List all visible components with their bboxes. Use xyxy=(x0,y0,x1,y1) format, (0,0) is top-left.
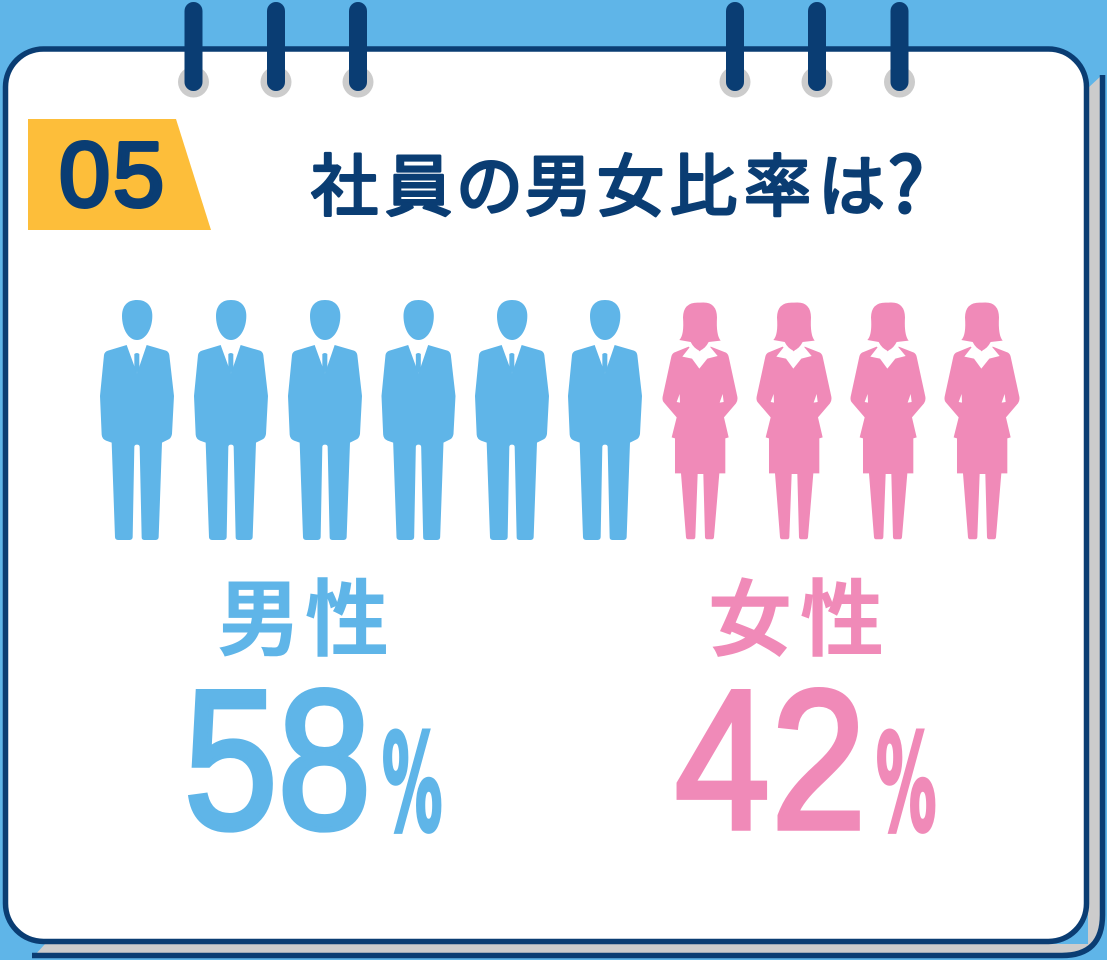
title: 社員の男女比率は xyxy=(311,133,885,230)
woman icon 3 xyxy=(850,302,925,539)
male percentage: 58 xyxy=(184,649,371,870)
female percentage: % xyxy=(876,706,936,862)
man icon 3 xyxy=(288,300,362,540)
man icon 4 xyxy=(381,300,455,540)
woman icon 2 xyxy=(756,302,831,539)
man icon 5 xyxy=(475,300,549,540)
number badge xyxy=(28,119,211,230)
male label: 男性 xyxy=(217,553,389,674)
binding rings xyxy=(178,11,915,98)
female label: 女性 xyxy=(708,553,884,674)
woman icon 4 xyxy=(944,302,1019,539)
number badge: 05 xyxy=(59,124,164,226)
woman icon 1 xyxy=(662,302,737,539)
title: ? xyxy=(888,124,924,234)
man icon 6 xyxy=(568,300,642,540)
pictogram row: women xyxy=(662,302,1019,539)
male percentage: % xyxy=(382,706,442,862)
man icon 1 xyxy=(100,300,174,540)
pictogram row: men xyxy=(100,300,642,540)
man icon 2 xyxy=(194,300,268,540)
female percentage: 42 xyxy=(675,650,866,871)
